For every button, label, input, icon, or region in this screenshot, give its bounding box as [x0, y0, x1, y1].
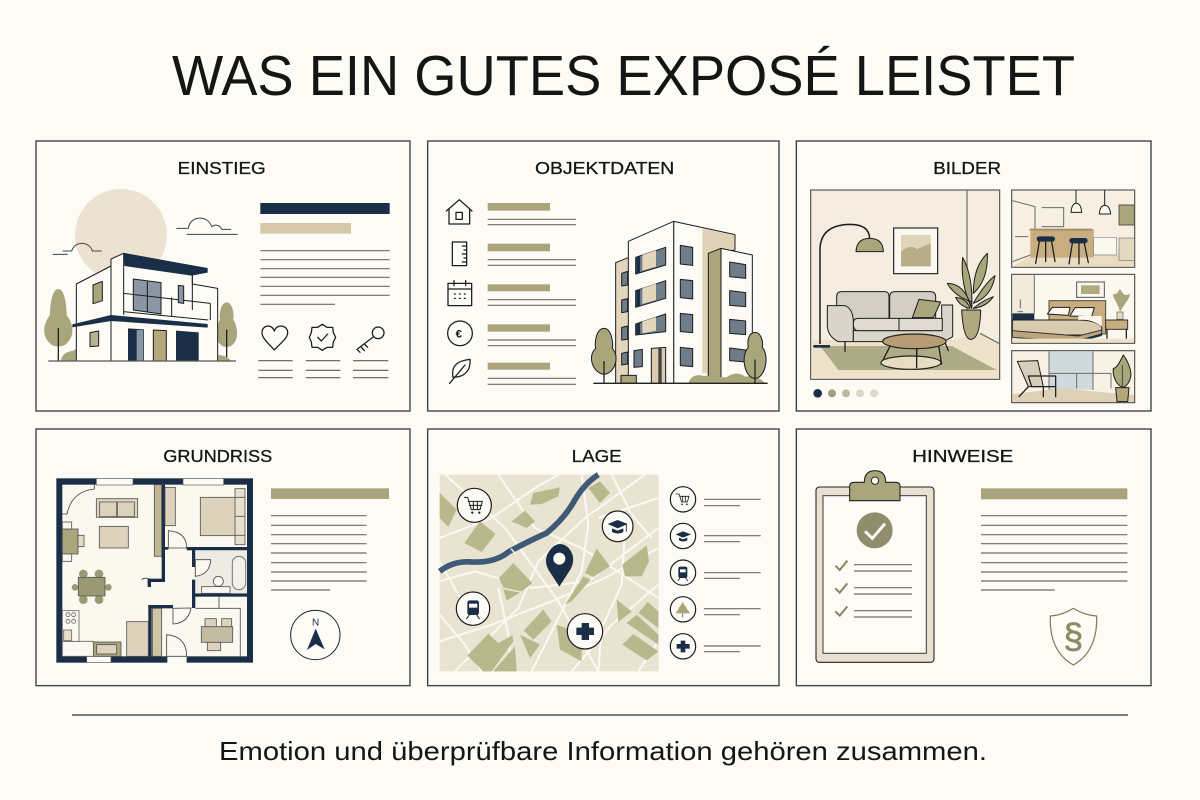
legend icon: train [670, 560, 696, 585]
heading: Objektdaten: OBJEKTDATEN [535, 158, 674, 178]
photo: bedroom [1012, 274, 1135, 343]
clipboard [816, 471, 934, 662]
icon: euro: € [456, 328, 463, 340]
divider [72, 714, 1128, 716]
dining table [72, 570, 112, 604]
panel: Bilder [796, 141, 1151, 411]
icon: house [446, 200, 472, 224]
legend icon: education [670, 523, 696, 549]
icon: seal with check [309, 324, 336, 350]
photo: kitchen [1012, 190, 1135, 267]
map marker: education [602, 511, 633, 542]
gallery dots [813, 389, 878, 398]
map marker: train [456, 592, 490, 625]
photo: lounge with chair [1012, 351, 1135, 403]
bathroom [195, 550, 247, 593]
compass: N [312, 618, 319, 629]
heading: Bilder: BILDER [933, 158, 1001, 178]
map marker: shopping [457, 488, 491, 522]
text lines [260, 251, 390, 304]
illustration: modern house [44, 189, 238, 361]
text lines [981, 516, 1127, 590]
map parks [440, 481, 658, 671]
panel: Hinweise [796, 429, 1151, 686]
data rows [488, 203, 576, 384]
icon: key [357, 327, 384, 352]
photo: living room [811, 190, 1000, 379]
icon: heart [262, 326, 288, 350]
compass [291, 610, 340, 660]
legend icon: tree [670, 597, 696, 622]
icon: legal shield: § [1064, 617, 1083, 656]
map [440, 475, 659, 671]
check badge [857, 512, 893, 548]
panel: Objektdaten [428, 141, 779, 411]
title: WAS EIN GUTES EXPOSÉ LEISTET [172, 44, 1075, 108]
map marker: medical [567, 614, 603, 649]
clip [850, 471, 900, 501]
interior walls [148, 485, 247, 657]
heading: Lage: LAGE [572, 446, 622, 466]
icon: calendar [448, 281, 472, 306]
icon: ruler [452, 242, 467, 266]
legend icon: medical [670, 634, 696, 659]
heading: Hinweise: HINWEISE [912, 446, 1013, 466]
floor plan [56, 478, 253, 663]
legend lines [704, 499, 761, 652]
tagline: Emotion und überprüfbare Information gehören zusammen. [219, 736, 987, 766]
text lines [271, 516, 367, 590]
icon: legal shield [1050, 608, 1097, 665]
headline bars [260, 203, 390, 234]
icon: euro [448, 321, 472, 346]
kitchen [62, 611, 93, 656]
panel: Lage [428, 429, 779, 686]
heading: Einstieg: EINSTIEG [178, 158, 266, 178]
icon: leaf [450, 359, 470, 383]
icon captions [258, 361, 388, 378]
illustration: apartment building [591, 221, 768, 383]
location pin [546, 544, 573, 587]
headline bar [981, 488, 1127, 499]
panel: Grundriss [36, 429, 410, 686]
legend [670, 487, 761, 659]
panel: Einstieg [36, 141, 410, 411]
heading: Grundriss: GRUNDRISS [163, 446, 272, 466]
legend icon: shopping [670, 487, 696, 512]
checklist [835, 561, 912, 617]
headline bar [271, 488, 389, 499]
river [440, 475, 598, 571]
map streets [440, 475, 658, 671]
